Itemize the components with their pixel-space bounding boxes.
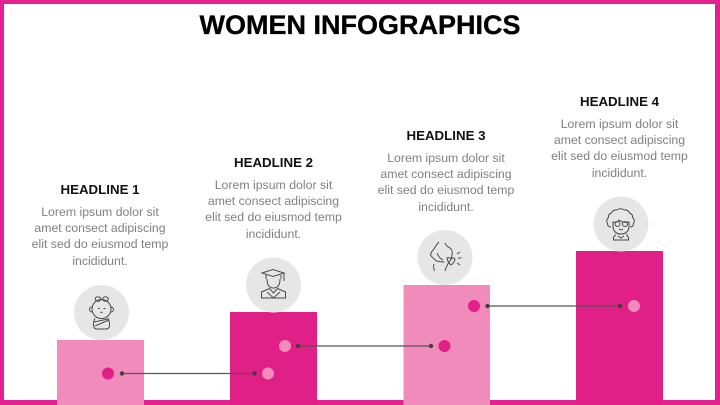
text block: headline 1 xyxy=(32,182,168,268)
text block: headline 1: HEADLINE 1 xyxy=(60,182,140,197)
text block: headline 3: elit sed do eiusmod temp xyxy=(378,183,514,197)
icon: graduate xyxy=(246,258,301,312)
connector 3 xyxy=(485,304,622,308)
text block: headline 3: HEADLINE 3 xyxy=(406,128,486,143)
text block: headline 2: incididunt. xyxy=(246,227,301,241)
connector 1 xyxy=(120,371,257,376)
text block: headline 2: amet consect adipiscing xyxy=(208,194,339,208)
text block: headline 2: HEADLINE 2 xyxy=(234,155,313,170)
text block: headline 4 xyxy=(551,94,688,180)
bar 2 xyxy=(230,312,317,405)
text block: headline 1: elit sed do eiusmod temp xyxy=(32,237,168,251)
text block: headline 1: amet consect adipiscing xyxy=(34,221,166,235)
text block: headline 4: elit sed do eiusmod temp xyxy=(551,149,688,163)
text block: headline 2 xyxy=(205,155,342,241)
icon: grandmother xyxy=(594,196,648,252)
icon: breast care xyxy=(418,230,472,285)
text block: headline 1: Lorem ipsum dolor sit xyxy=(41,204,159,218)
dots xyxy=(102,300,640,380)
text block: headline 3 xyxy=(378,128,514,214)
text block: headline 4: HEADLINE 4 xyxy=(580,94,659,109)
text block: headline 4: amet consect adipiscing xyxy=(554,133,685,147)
text block: headline 2: Lorem ipsum dolor sit xyxy=(215,178,332,192)
connector 2 xyxy=(296,344,433,348)
title: WOMEN INFOGRAPHICS xyxy=(200,10,520,40)
bar 1 xyxy=(57,340,144,405)
icon: baby xyxy=(74,285,129,340)
text block: headline 4: Lorem ipsum dolor sit xyxy=(561,116,678,130)
text block: headline 4: incididunt. xyxy=(592,166,647,180)
text block: headline 3: amet consect adipiscing xyxy=(380,167,512,181)
text block: headline 1: incididunt. xyxy=(72,254,128,268)
bar 3 xyxy=(404,285,490,405)
text block: headline 3: incididunt. xyxy=(418,200,474,214)
text block: headline 2: elit sed do eiusmod temp xyxy=(205,210,342,224)
bar 4 xyxy=(576,251,663,405)
text block: headline 3: Lorem ipsum dolor sit xyxy=(387,150,505,164)
